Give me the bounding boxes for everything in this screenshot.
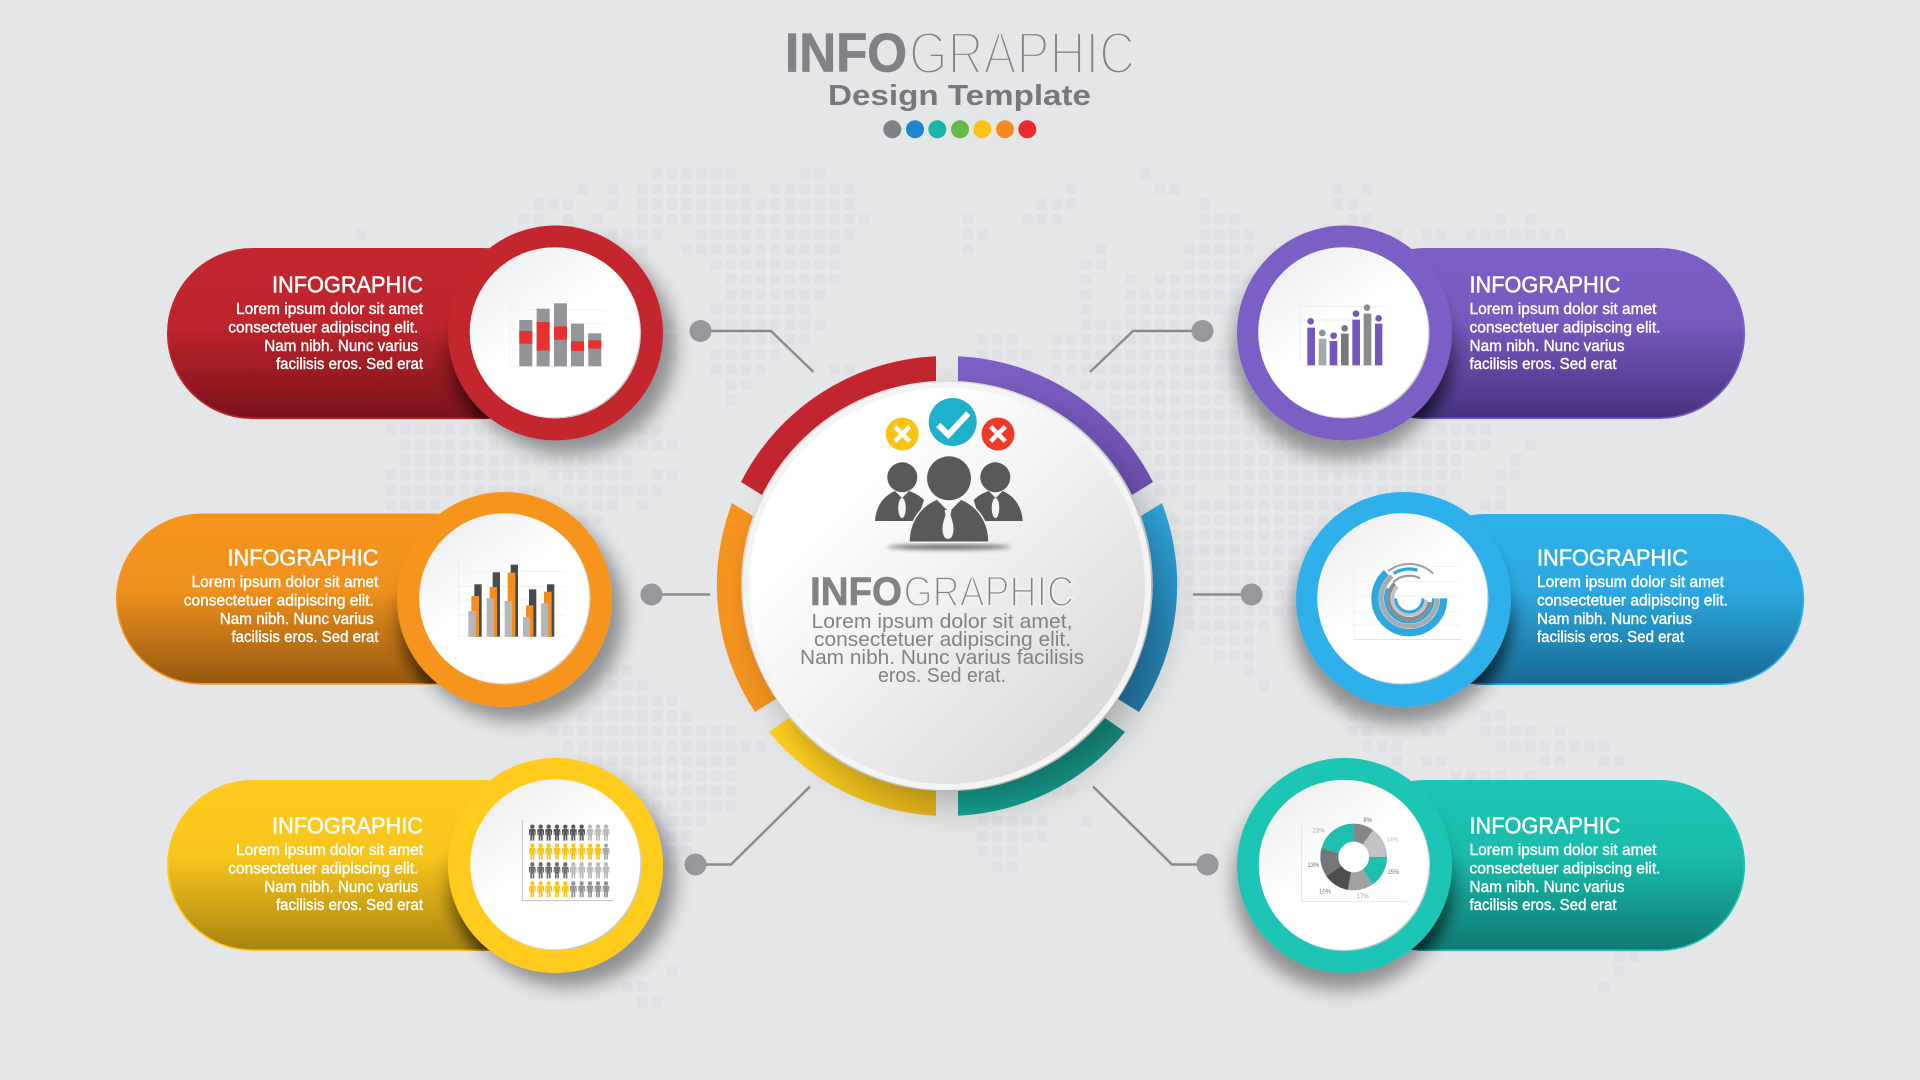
yellow text: Nam nibh. Nunc varius xyxy=(264,879,419,896)
donut chart: 17% xyxy=(1357,894,1369,900)
donut chart: 15% xyxy=(1387,870,1400,876)
infographic canvas xyxy=(116,32,1804,1001)
panel: blue xyxy=(1296,492,1803,712)
purple text: facilisis eros. Sed erat xyxy=(1470,356,1617,373)
connector: purple xyxy=(1090,320,1214,372)
connector: orange xyxy=(640,584,710,606)
connector: yellow xyxy=(684,786,810,876)
panel: red xyxy=(168,226,663,446)
orange pill xyxy=(116,514,440,685)
panel: purple xyxy=(1237,226,1744,446)
people pictogram chart xyxy=(522,820,613,901)
ring segment: blue xyxy=(1118,503,1177,712)
purple text: consectetuer adipiscing elit. xyxy=(1470,319,1660,336)
hub body text: Lorem ipsum dolor sit amet, xyxy=(812,610,1072,633)
red text: consectetuer adipiscing elit. xyxy=(228,319,418,336)
teal text: consectetuer adipiscing elit. xyxy=(1470,860,1660,877)
purple ring xyxy=(1237,226,1452,440)
donut chart: 13% xyxy=(1307,863,1320,869)
teal text: INFOGRAPHIC xyxy=(1470,813,1620,839)
donut chart xyxy=(1302,818,1408,902)
teal ring xyxy=(1237,758,1452,973)
connector: red xyxy=(690,320,814,372)
ring segment: orange xyxy=(717,503,776,712)
central hub xyxy=(717,356,1177,816)
teal text: facilisis eros. Sed erat xyxy=(1470,897,1617,914)
orange text: consectetuer adipiscing elit. xyxy=(184,592,374,609)
teal disc xyxy=(1259,780,1430,951)
blue text: INFOGRAPHIC xyxy=(1537,545,1688,571)
icon: business people xyxy=(875,456,1023,550)
panel: orange xyxy=(117,492,612,712)
red text xyxy=(228,272,424,373)
red text: facilisis eros. Sed erat xyxy=(276,356,424,373)
background: dotted world map xyxy=(354,166,1641,1009)
ring segment: yellow xyxy=(769,718,936,816)
orange text: INFOGRAPHIC xyxy=(228,545,378,571)
orange text xyxy=(184,545,379,646)
hub heading xyxy=(810,569,1074,616)
yellow text xyxy=(228,813,424,914)
hub body text: consectetuer adipiscing elit. xyxy=(814,628,1071,651)
teal text xyxy=(1470,813,1660,914)
radial arc chart xyxy=(1354,550,1462,647)
yellow text: INFOGRAPHIC xyxy=(272,813,423,839)
red text: Nam nibh. Nunc varius xyxy=(264,338,419,355)
red ring xyxy=(448,226,663,440)
red text: Lorem ipsum dolor sit amet xyxy=(236,301,424,318)
yellow text: consectetuer adipiscing elit. xyxy=(228,860,418,877)
orange disc xyxy=(419,513,590,684)
teal text: Lorem ipsum dolor sit amet xyxy=(1470,842,1657,859)
colour dots xyxy=(883,120,1036,138)
donut chart: 14% xyxy=(1386,838,1399,844)
hub body text: Nam nibh. Nunc varius facilisis xyxy=(800,646,1084,669)
title: INFO xyxy=(785,23,907,84)
purple text xyxy=(1470,272,1660,373)
yellow pill xyxy=(167,780,490,952)
donut chart: 8% xyxy=(1363,818,1373,824)
hub body text: eros. Sed erat. xyxy=(878,664,1006,687)
ring segment: purple xyxy=(958,356,1153,495)
red disc xyxy=(470,247,641,418)
stacked bar chart xyxy=(510,297,607,366)
blue ring xyxy=(1296,492,1511,707)
lollipop bar chart xyxy=(1300,303,1385,365)
yellow text: Lorem ipsum dolor sit amet xyxy=(236,842,424,859)
orange text: Nam nibh. Nunc varius xyxy=(220,611,374,628)
hub body text xyxy=(800,610,1084,687)
connector: teal xyxy=(1093,786,1218,876)
blue text: consectetuer adipiscing elit. xyxy=(1537,592,1728,609)
hub heading: INFO xyxy=(810,570,902,614)
icon: red cross xyxy=(982,418,1014,450)
panel: teal xyxy=(1237,758,1744,978)
grouped bar chart xyxy=(458,558,565,637)
icon: yellow cross xyxy=(886,418,919,450)
purple pill xyxy=(1410,248,1746,420)
purple text: INFOGRAPHIC xyxy=(1470,272,1620,298)
red pill xyxy=(167,248,491,420)
central disc xyxy=(743,382,1151,790)
panel: yellow xyxy=(168,758,663,978)
teal text: Nam nibh. Nunc varius xyxy=(1470,879,1625,896)
blue text: Lorem ipsum dolor sit amet xyxy=(1537,574,1725,591)
donut chart: 23% xyxy=(1313,829,1325,835)
title: GRAPHIC xyxy=(909,20,1135,86)
yellow text: facilisis eros. Sed erat xyxy=(276,897,424,914)
yellow ring xyxy=(448,758,663,973)
blue text: facilisis eros. Sed erat xyxy=(1537,629,1685,646)
teal pill xyxy=(1411,780,1746,952)
blue text: Nam nibh. Nunc varius xyxy=(1537,611,1692,628)
blue pill xyxy=(1470,514,1804,686)
red text: INFOGRAPHIC xyxy=(272,272,423,298)
ring segment: teal xyxy=(958,718,1125,816)
purple disc xyxy=(1258,247,1430,418)
title xyxy=(785,20,1135,86)
hub heading: GRAPHIC xyxy=(904,569,1074,616)
orange text: facilisis eros. Sed erat xyxy=(232,629,379,646)
connector: blue xyxy=(1193,584,1262,606)
purple text: Lorem ipsum dolor sit amet xyxy=(1470,301,1657,318)
ring segment: red xyxy=(741,356,936,495)
orange text: Lorem ipsum dolor sit amet xyxy=(192,574,379,591)
donut chart: 10% xyxy=(1319,889,1332,895)
blue disc xyxy=(1317,513,1488,684)
purple text: Nam nibh. Nunc varius xyxy=(1470,338,1625,355)
yellow disc xyxy=(470,779,642,950)
orange ring xyxy=(397,492,612,707)
subtitle: Design Template xyxy=(828,80,1091,112)
icon: blue check xyxy=(929,398,977,446)
blue text xyxy=(1537,545,1728,646)
